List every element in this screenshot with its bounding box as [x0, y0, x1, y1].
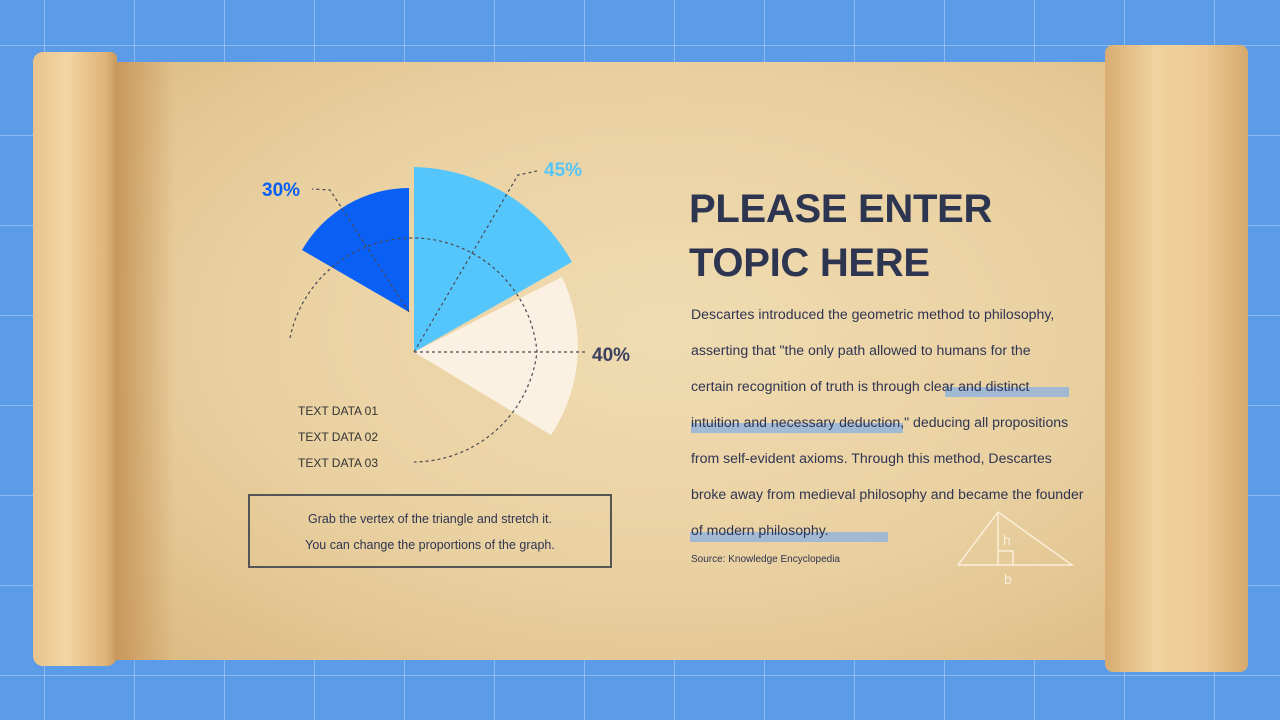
- body text: of modern philosophy.: [691, 522, 829, 538]
- slice 45%: [414, 167, 572, 352]
- body text: broke away from medieval philosophy and became the founder: [691, 486, 1084, 502]
- instruction box: [248, 494, 612, 568]
- label 45%: 45%: [544, 160, 582, 181]
- body text: certain recognition of truth is through clear and distinct: [691, 378, 1029, 394]
- legend: TEXT DATA 01: [298, 404, 378, 418]
- instruction box: You can change the proportions of the graph.: [305, 538, 555, 552]
- parchment sheet: [110, 62, 1120, 660]
- slice 40%: [414, 277, 578, 435]
- legend: TEXT DATA 02: [298, 430, 378, 444]
- label 30%: 30%: [262, 180, 300, 201]
- title: PLEASE ENTER: [689, 187, 992, 231]
- body text: Descartes introduced the geometric method to philosophy,: [691, 306, 1054, 322]
- body text: asserting that "the only path allowed to humans for the: [691, 342, 1031, 358]
- label 40%: 40%: [592, 345, 630, 366]
- body text: from self-evident axioms. Through this method, Descartes: [691, 450, 1052, 466]
- right roll: [1105, 45, 1248, 672]
- instruction box: Grab the vertex of the triangle and stretch it.: [308, 512, 552, 526]
- body text: intuition and necessary deduction," deducing all propositions: [691, 414, 1068, 430]
- legend: [298, 404, 378, 470]
- triangle sketch: [958, 512, 1072, 587]
- title: [689, 187, 992, 285]
- left roll: [33, 52, 117, 666]
- left roll inner shadow: [115, 62, 175, 660]
- highlights: [945, 387, 1069, 397]
- triangle sketch: b: [1004, 571, 1012, 587]
- legend: TEXT DATA 03: [298, 456, 378, 470]
- slice 30%: [302, 188, 409, 312]
- source: Source: Knowledge Encyclopedia: [691, 554, 840, 565]
- title: TOPIC HERE: [689, 241, 930, 285]
- triangle sketch: h: [1003, 532, 1011, 548]
- body text: [691, 306, 1084, 538]
